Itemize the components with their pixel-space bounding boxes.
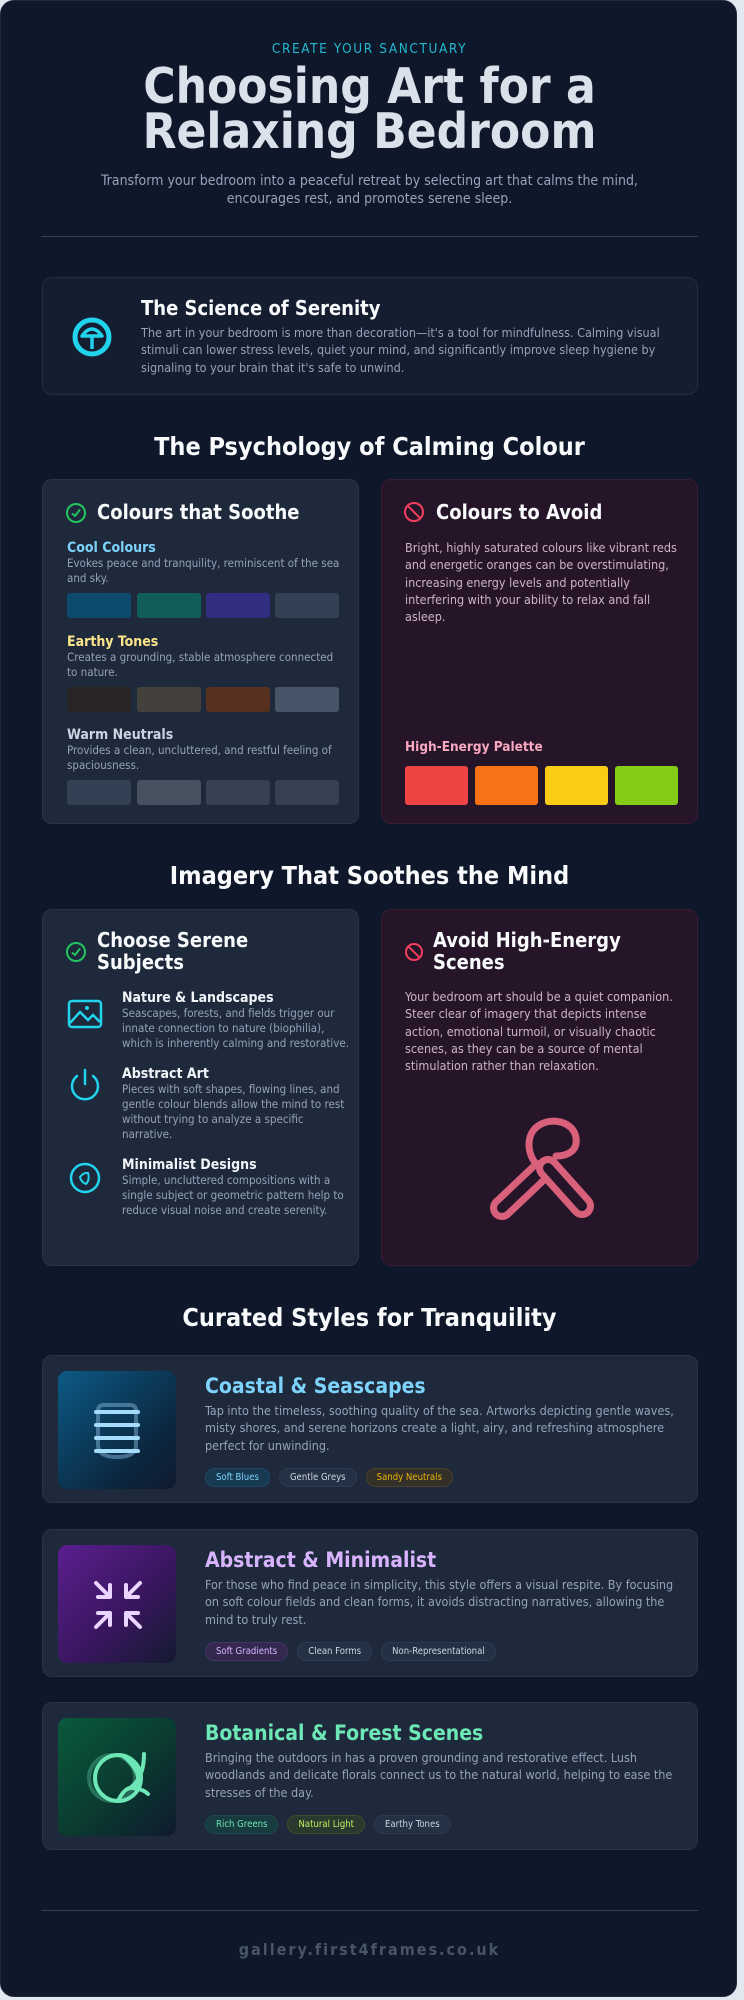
icon: umbrella circle bbox=[72, 318, 112, 356]
earthy tones: Earthy Tones bbox=[67, 634, 158, 650]
tags: Gentle Greys bbox=[290, 1472, 346, 1483]
panel: science of serenity bbox=[42, 277, 698, 395]
title bbox=[143, 58, 596, 160]
style card: coastal bbox=[42, 1355, 698, 1503]
description: Tap into the timeless, soothing quality of the sea. Artworks depicting gentle waves, misty shores, and serene horizons create a light, airy, and refreshing atmosphere perfect for unwinding. bbox=[205, 1403, 674, 1453]
tags: Soft Blues bbox=[216, 1472, 259, 1483]
warm neutrals: Provides a clean, uncluttered, and restful feeling of spaciousness. bbox=[67, 743, 332, 772]
heading bbox=[433, 928, 621, 974]
eyebrow: CREATE YOUR SANCTUARY bbox=[272, 41, 467, 57]
title: Relaxing Bedroom bbox=[143, 103, 596, 160]
title: Choosing Art for a bbox=[143, 58, 596, 115]
tags: Natural Light bbox=[298, 1819, 354, 1830]
heading: Scenes bbox=[433, 950, 505, 974]
palette bbox=[405, 766, 468, 805]
heading: The Science of Serenity bbox=[141, 296, 380, 320]
thumb: abstract bbox=[58, 1545, 176, 1663]
tags bbox=[205, 1468, 453, 1487]
item: minimalist: Simple, uncluttered compositions with a single subject or geometric pattern help to reduce visual noise and create serenity. bbox=[122, 1173, 344, 1217]
earthy tones bbox=[67, 634, 333, 679]
earthy tones: Creates a grounding, stable atmosphere connected to nature. bbox=[67, 650, 333, 679]
item: nature: Nature & Landscapes bbox=[122, 990, 274, 1006]
text: Bright, highly saturated colours like vibrant reds and energetic oranges can be overstimulating, increasing energy levels and potentially interfering with your ability to relax and fall asleep. bbox=[405, 540, 677, 624]
icon: tangled knot bbox=[490, 1118, 594, 1220]
subtitle: encourages rest, and promotes serene sleep. bbox=[227, 191, 512, 207]
item: minimalist: Minimalist Designs bbox=[122, 1157, 257, 1173]
palette label: High-Energy Palette bbox=[405, 739, 543, 755]
icon: ban bbox=[404, 502, 424, 522]
title: Botanical & Forest Scenes bbox=[205, 1721, 483, 1745]
warm neutrals bbox=[67, 727, 332, 772]
title: Abstract & Minimalist bbox=[205, 1548, 436, 1572]
item: abstract: Pieces with soft shapes, flowing lines, and gentle colour blends allow the mind to rest without trying to analyze a specific narrative. bbox=[122, 1082, 344, 1141]
panel: colours that soothe bbox=[42, 479, 359, 824]
heading: imagery: Imagery That Soothes the Mind bbox=[170, 861, 569, 890]
cool colours: Cool Colours bbox=[67, 540, 156, 556]
tags: Soft Gradients bbox=[216, 1646, 277, 1657]
heading bbox=[97, 928, 248, 974]
title: Coastal & Seascapes bbox=[205, 1374, 426, 1398]
subtitle: Transform your bedroom into a peaceful retreat by selecting art that calms the mind, bbox=[101, 173, 638, 189]
item: minimalist bbox=[70, 1157, 344, 1217]
tags: Clean Forms bbox=[308, 1646, 361, 1657]
thumb: coastal bbox=[58, 1371, 176, 1489]
style card: botanical bbox=[42, 1702, 698, 1850]
tags: Sandy Neutrals bbox=[377, 1472, 442, 1483]
heading: Avoid High-Energy bbox=[433, 928, 621, 952]
tags bbox=[205, 1815, 451, 1834]
footer: gallery.first4frames.co.uk bbox=[239, 1940, 500, 1959]
heading: psychology: The Psychology of Calming Colour bbox=[154, 432, 585, 461]
warm neutrals: Warm Neutrals bbox=[67, 727, 173, 743]
icon: check bbox=[66, 503, 86, 523]
description: Bringing the outdoors in has a proven grounding and restorative effect. Lush woodlands and delicate florals connect us to the natural world, helping to ease the stresses of the day. bbox=[205, 1750, 672, 1800]
thumb: botanical bbox=[58, 1718, 176, 1836]
style card: abstract bbox=[42, 1529, 698, 1677]
item: abstract bbox=[70, 1066, 344, 1141]
panel: avoid high-energy bbox=[381, 909, 698, 1266]
heading: Colours that Soothe bbox=[97, 500, 299, 524]
tags bbox=[205, 1642, 496, 1661]
heading: Colours to Avoid bbox=[436, 500, 602, 524]
description: For those who find peace in simplicity, this style offers a visual respite. By focusing on soft colour fields and clean forms, it avoids distracting narratives, allowing the mind to truly rest. bbox=[205, 1577, 673, 1627]
text: The art in your bedroom is more than decoration—it's a tool for mindfulness. Calming visual stimuli can lower stress levels, quiet your mind, and significantly improve sleep hygiene by signaling to your brain that it's safe to unwind. bbox=[141, 325, 660, 375]
tags: Earthy Tones bbox=[385, 1819, 440, 1830]
item: abstract: Abstract Art bbox=[122, 1066, 209, 1082]
icon: ban bbox=[405, 943, 423, 961]
heading: curated styles: Curated Styles for Tranquility bbox=[182, 1303, 557, 1332]
heading: Subjects bbox=[97, 950, 184, 974]
tags: Non-Representational bbox=[392, 1646, 485, 1657]
panel: colours to avoid bbox=[381, 479, 698, 824]
icon: check bbox=[66, 942, 86, 962]
tags: Rich Greens bbox=[216, 1819, 267, 1830]
panel: choose serene subjects bbox=[42, 909, 359, 1266]
subtitle bbox=[100, 173, 638, 207]
item: nature bbox=[68, 990, 349, 1050]
cool colours: Evokes peace and tranquility, reminiscent of the sea and sky. bbox=[67, 556, 339, 585]
cool colours bbox=[67, 540, 339, 585]
heading: Choose Serene bbox=[97, 928, 248, 952]
text: Your bedroom art should be a quiet companion. Steer clear of imagery that depicts intense action, emotional turmoil, or visually chaotic scenes, as they can be a source of mental stimulation rather than relaxation. bbox=[405, 989, 673, 1073]
item: nature: Seascapes, forests, and fields trigger our innate connection to nature (biophilia), which is inherently calming and restorative. bbox=[122, 1006, 349, 1050]
